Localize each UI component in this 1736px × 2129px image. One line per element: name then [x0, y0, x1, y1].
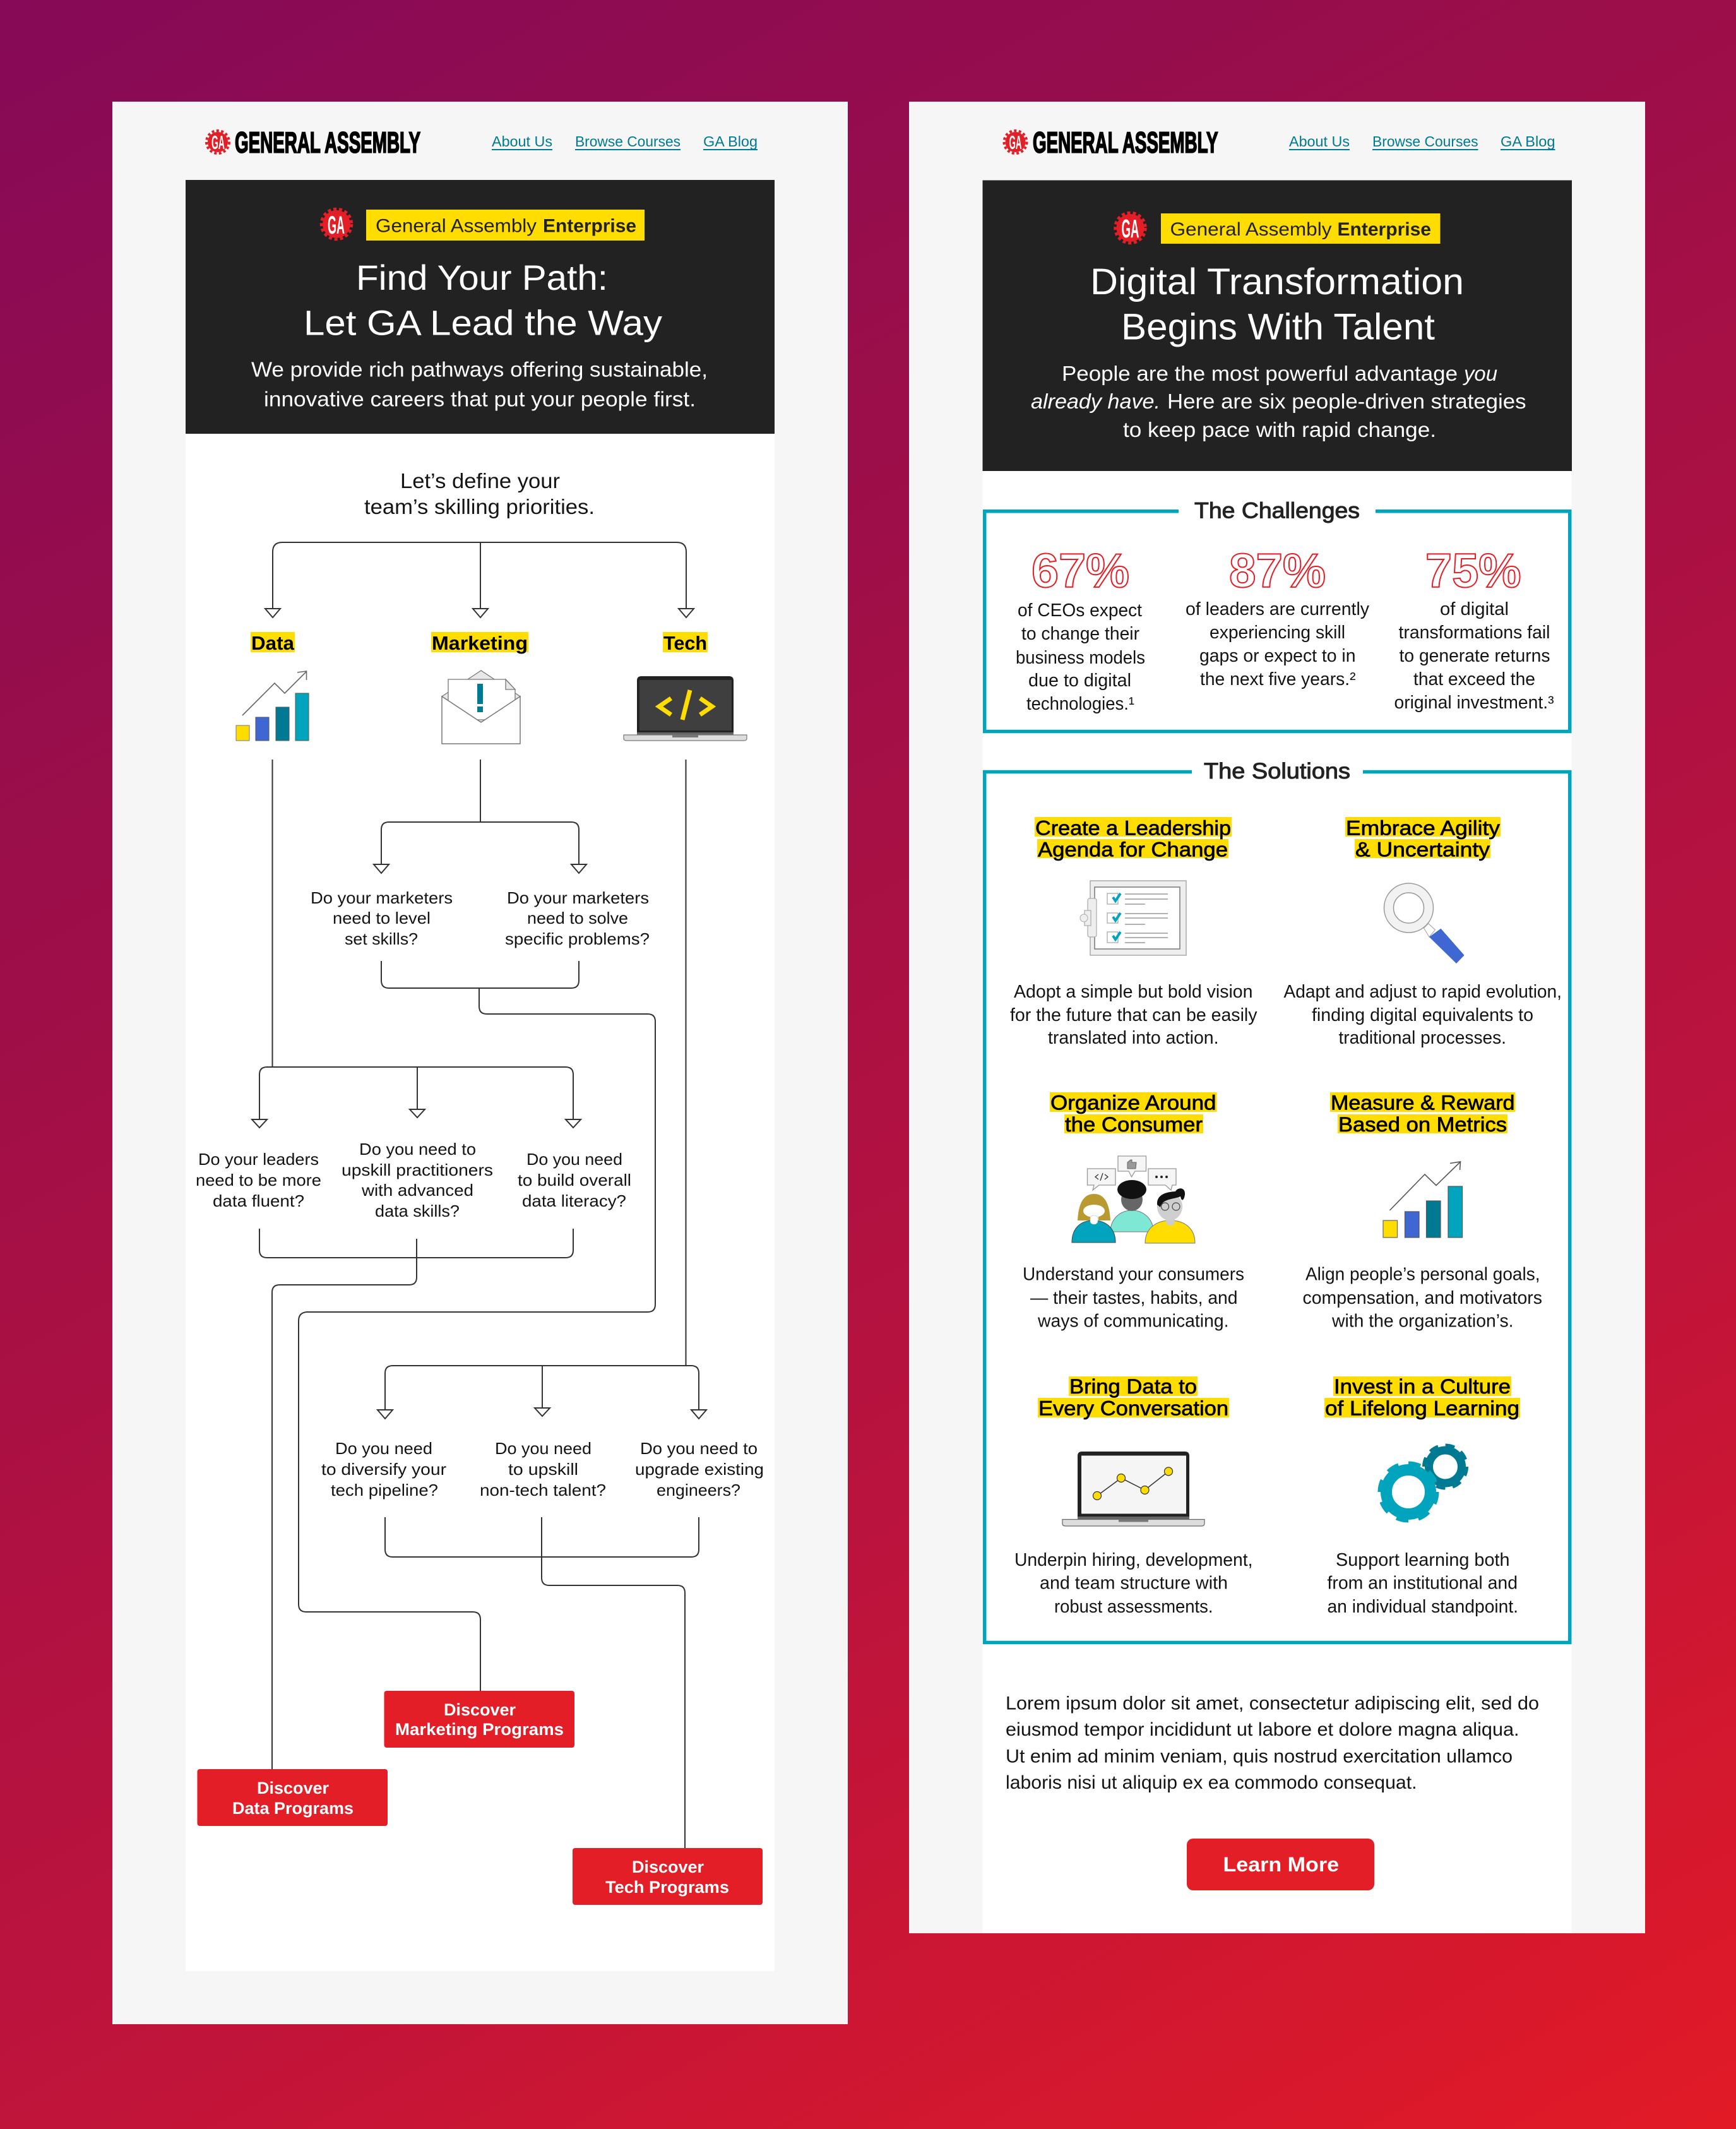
navigation links: Browse Courses — [575, 133, 681, 150]
tech branch — [378, 760, 706, 1848]
badge: Enterprise — [543, 216, 636, 236]
stat: 67%: 67% — [1031, 544, 1129, 598]
button: marketing programs: Marketing Programs — [395, 1720, 564, 1739]
icon: code laptop — [624, 676, 747, 741]
icon: three people with speech bubbles — [1072, 1156, 1195, 1243]
question: level set skills: set skills? — [345, 929, 418, 948]
solution: leadership agenda: Adopt a simple but bold vision — [1014, 982, 1252, 1002]
icon: envelope — [442, 671, 520, 744]
stat: 87%: 87% — [1229, 544, 1326, 598]
button: marketing programs — [384, 1691, 574, 1748]
solution: bring data: Bring Data to — [1069, 1375, 1197, 1398]
question: diversify tech pipeline: to diversify your — [321, 1460, 446, 1479]
solution: bring data: Underpin hiring, development, — [1014, 1550, 1252, 1570]
title: Let GA Lead the Way — [304, 303, 662, 342]
icon: GA seal — [1115, 213, 1145, 243]
icon: gears — [1380, 1446, 1466, 1520]
body paragraph: Lorem ipsum dolor sit amet, consectetur adipiscing elit, sed do — [1006, 1693, 1539, 1714]
hero header — [186, 180, 775, 434]
solution: measure and reward: compensation, and motivators — [1303, 1288, 1542, 1308]
panel: digital transformation — [909, 102, 1645, 1933]
button: tech programs — [573, 1848, 763, 1905]
stat: 75%: that exceed the — [1413, 669, 1535, 689]
solution: bring data — [1014, 1375, 1252, 1617]
intro text: Let’s define your — [400, 469, 560, 492]
question: upgrade existing engineers: upgrade existing — [635, 1460, 764, 1479]
navigation links: About Us — [1289, 133, 1350, 150]
stat: 87% — [1186, 544, 1370, 689]
section: the solutions — [985, 759, 1570, 1643]
icon: clipboard checklist — [1080, 881, 1186, 955]
subtitle — [251, 357, 708, 410]
question: leaders data fluent — [196, 1150, 321, 1210]
question: diversify tech pipeline — [321, 1439, 446, 1500]
question: upskill non-tech talent: to upskill — [508, 1460, 578, 1479]
subtitle: already have. — [1031, 390, 1160, 413]
button: data programs — [197, 1769, 388, 1826]
button: tech programs: Discover — [632, 1858, 704, 1876]
stat: 87%: the next five years.² — [1200, 669, 1356, 689]
subtitle: People are the most powerful advantage — [1062, 362, 1458, 385]
question: overall data literacy — [518, 1150, 631, 1210]
section: the challenges — [985, 499, 1570, 731]
top branching arrows — [265, 542, 694, 617]
logo: General Assembly — [206, 126, 420, 159]
solution: agility — [1284, 817, 1562, 1048]
question: upgrade existing engineers — [635, 1439, 764, 1500]
title: Digital Transformation — [1090, 261, 1464, 302]
logo: General Assembly — [1004, 126, 1218, 159]
question: upskill practitioners: upskill practitioners — [342, 1160, 493, 1179]
title: Find Your Path: — [356, 258, 608, 297]
title — [1090, 261, 1464, 347]
stat: 67%: technologies.¹ — [1026, 694, 1134, 714]
question: solve specific problems: need to solve — [527, 909, 628, 927]
solution: organize around consumer: ways of communicating. — [1037, 1311, 1228, 1331]
button: data programs: Discover — [257, 1779, 329, 1798]
solution: agility: traditional processes. — [1338, 1028, 1506, 1048]
badge — [366, 210, 645, 241]
stat: 67%: business models — [1016, 648, 1145, 668]
solutions frame — [985, 772, 1570, 1643]
body paragraph: eiusmod tempor incididunt ut labore et dolore magna aliqua. — [1006, 1719, 1519, 1740]
solution: leadership agenda: Agenda for Change — [1038, 838, 1228, 861]
solution: agility: Adapt and adjust to rapid evolution, — [1284, 982, 1562, 1002]
title — [304, 258, 662, 342]
solution: measure and reward: Align people’s personal goals, — [1305, 1264, 1540, 1284]
stat: 75%: to generate returns — [1399, 646, 1550, 666]
solution: leadership agenda: translated into action. — [1048, 1028, 1218, 1048]
badge — [1161, 213, 1441, 244]
button: data programs: Data Programs — [232, 1799, 354, 1818]
category label: Marketing: Marketing — [432, 632, 528, 654]
solution: bring data: and team structure with — [1040, 1573, 1228, 1594]
title: Begins With Talent — [1121, 307, 1435, 347]
question: overall data literacy: data literacy? — [522, 1191, 626, 1210]
solution: leadership agenda: for the future that can be easily — [1010, 1005, 1257, 1025]
solution: leadership agenda: Create a Leadership — [1035, 817, 1231, 840]
body paragraph: Ut enim ad minim veniam, quis nostrud exercitation ullamco — [1006, 1746, 1513, 1767]
question: upgrade existing engineers: Do you need to — [640, 1439, 758, 1458]
solution: measure and reward: with the organization’s. — [1331, 1311, 1514, 1331]
solution: organize around consumer: Understand your consumers — [1023, 1264, 1244, 1284]
marketing branch — [299, 760, 655, 1691]
solution: organize around consumer: — their tastes, habits, and — [1030, 1288, 1237, 1308]
category label: Tech: Tech — [663, 632, 707, 654]
stat: 75%: of digital — [1440, 599, 1509, 619]
solution: lifelong learning: from an institutional and — [1327, 1573, 1518, 1594]
question: overall data literacy: to build overall — [518, 1171, 631, 1190]
question: upskill practitioners: with advanced — [361, 1181, 473, 1200]
navigation links: Browse Courses — [1372, 133, 1478, 150]
hero header — [982, 181, 1572, 471]
solution: lifelong learning: Support learning both — [1336, 1550, 1510, 1570]
question: upskill practitioners — [342, 1140, 493, 1220]
category label: Data: Data — [251, 632, 295, 654]
icon: GA seal: GA — [328, 212, 345, 239]
heading: the solutions: The Solutions — [1204, 759, 1350, 784]
stat: 87%: gaps or expect to in — [1199, 646, 1356, 666]
body paragraph: laboris nisi ut aliquip ex ea commodo consequat. — [1006, 1772, 1417, 1793]
solution: measure and reward — [1303, 1091, 1542, 1331]
icon: bar chart — [1383, 1162, 1462, 1237]
icon: magnifying glass — [1384, 883, 1465, 963]
solution: agility: finding digital equivalents to — [1312, 1005, 1533, 1025]
subtitle — [1031, 362, 1526, 441]
question: leaders data fluent: Do your leaders — [198, 1150, 319, 1169]
subtitle: to keep pace with rapid change. — [1123, 418, 1436, 441]
question: upgrade existing engineers: engineers? — [657, 1481, 740, 1500]
stat: 87%: experiencing skill — [1210, 623, 1345, 643]
question: upskill non-tech talent: non-tech talent? — [480, 1481, 606, 1500]
badge: General Assembly — [1170, 219, 1332, 240]
question: diversify tech pipeline: tech pipeline? — [331, 1481, 438, 1500]
intro text — [364, 469, 595, 518]
solution: bring data: robust assessments. — [1054, 1597, 1213, 1617]
solution: bring data: Every Conversation — [1038, 1397, 1228, 1419]
logo: General Assembly: GENERAL ASSEMBLY — [235, 126, 420, 159]
icon: bar chart — [236, 671, 309, 741]
badge: General Assembly — [376, 216, 537, 236]
panel: find your path flowchart — [112, 102, 848, 2024]
stat: 75%: transformations fail — [1399, 623, 1550, 643]
subtitle: you — [1463, 362, 1497, 385]
stat: 67% — [1016, 544, 1145, 714]
question: solve specific problems: specific problems? — [505, 929, 650, 948]
icon: GA seal — [321, 209, 352, 239]
stat: 75%: 75% — [1425, 544, 1521, 598]
question: solve specific problems — [505, 888, 650, 948]
logo: General Assembly: GA — [211, 131, 225, 153]
solution: lifelong learning: an individual standpoint. — [1327, 1597, 1518, 1617]
challenges frame — [985, 511, 1570, 731]
button: learn more — [1187, 1839, 1374, 1890]
subtitle: innovative careers that put your people first. — [264, 388, 696, 410]
button: tech programs: Tech Programs — [605, 1878, 729, 1897]
solution: measure and reward: Measure & Reward — [1331, 1091, 1515, 1114]
stat: 67%: of CEOs expect — [1018, 600, 1142, 621]
badge: Enterprise — [1337, 219, 1431, 240]
navigation links: About Us — [492, 133, 552, 150]
question: upskill practitioners: Do you need to — [359, 1140, 476, 1159]
question: level set skills: Do your marketers — [311, 888, 453, 907]
question: leaders data fluent: need to be more — [196, 1171, 321, 1190]
question: diversify tech pipeline: Do you need — [335, 1439, 432, 1458]
solution: measure and reward: Based on Metrics — [1338, 1113, 1507, 1136]
icon: laptop line chart — [1062, 1452, 1204, 1526]
solution: lifelong learning: of Lifelong Learning — [1325, 1397, 1519, 1419]
stat: 67%: to change their — [1021, 624, 1139, 644]
stat: 75% — [1394, 544, 1554, 713]
body paragraph — [1006, 1693, 1539, 1793]
solution: agility: & Uncertainty — [1355, 838, 1490, 861]
question: level set skills — [311, 888, 453, 948]
solution: organize around consumer: Organize Around — [1050, 1091, 1216, 1114]
solution: lifelong learning: Invest in a Culture — [1334, 1375, 1511, 1398]
heading: the challenges: The Challenges — [1194, 499, 1360, 523]
logo: General Assembly: GENERAL ASSEMBLY — [1033, 126, 1218, 159]
solution: organize around consumer — [1023, 1091, 1244, 1331]
subtitle: We provide rich pathways offering sustainable, — [251, 357, 708, 381]
question: upskill non-tech talent — [480, 1439, 606, 1500]
button: learn more: Learn More — [1223, 1853, 1339, 1876]
intro text: team’s skilling priorities. — [364, 495, 595, 518]
question: level set skills: need to level — [333, 909, 431, 927]
navigation links — [492, 133, 758, 150]
stat: 75%: original investment.³ — [1394, 693, 1554, 713]
navigation links: GA Blog — [703, 133, 758, 150]
logo: General Assembly: GA — [1009, 131, 1021, 153]
navigation links: GA Blog — [1501, 133, 1555, 150]
question: leaders data fluent: data fluent? — [213, 1191, 304, 1210]
icon: GA seal: GA — [1121, 214, 1139, 243]
stat: 67%: due to digital — [1028, 671, 1131, 691]
solution: leadership agenda — [1010, 817, 1257, 1048]
question: upskill practitioners: data skills? — [375, 1202, 460, 1220]
stat: 87%: of leaders are currently — [1186, 599, 1370, 619]
solution: organize around consumer: the Consumer — [1065, 1113, 1203, 1136]
data branch — [252, 760, 581, 1769]
subtitle: Here are six people-driven strategies — [1167, 390, 1526, 413]
question: overall data literacy: Do you need — [526, 1150, 622, 1169]
solution: agility: Embrace Agility — [1346, 817, 1500, 840]
button: marketing programs: Discover — [444, 1700, 516, 1719]
question: upskill non-tech talent: Do you need — [495, 1439, 592, 1458]
navigation links — [1289, 133, 1555, 150]
question: solve specific problems: Do your marketers — [507, 888, 649, 907]
solution: lifelong learning — [1324, 1375, 1520, 1617]
